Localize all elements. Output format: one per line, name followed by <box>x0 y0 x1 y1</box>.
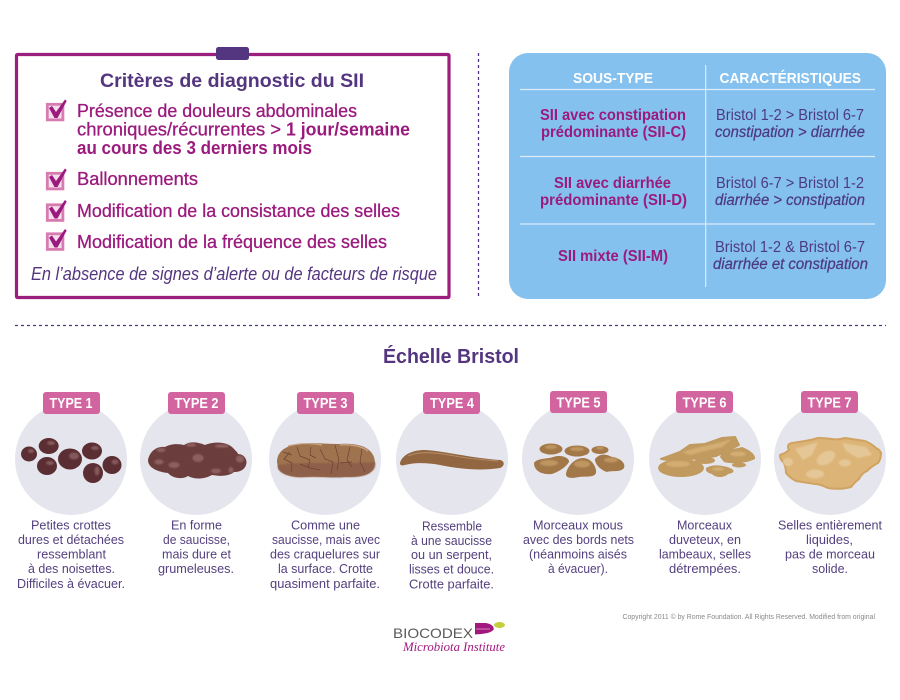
caption: type 3 <box>270 518 381 591</box>
caption: type 2: de saucisse, <box>163 532 230 547</box>
criterion 3 text: Modification de la consistance des selles <box>77 201 400 221</box>
caption: type 6: lambeaux, selles <box>659 546 751 562</box>
badge: type 2 <box>168 392 225 414</box>
panel tab <box>216 47 249 60</box>
badge: type 4: TYPE 4 <box>430 395 475 412</box>
criterion 1 text: Présence de douleurs abdominales <box>77 101 357 121</box>
caption: type 6: duveteux, en <box>669 532 741 547</box>
badge: type 4 <box>423 392 480 414</box>
caption: type 6: détrempées. <box>669 561 741 576</box>
badge: type 5 <box>550 391 607 413</box>
criterion 1 text <box>77 101 410 158</box>
caption: type 2 <box>158 518 234 576</box>
caption: type 3: saucisse, mais avec <box>272 532 380 547</box>
badge: type 7: TYPE 7 <box>808 394 852 412</box>
row: SII-M <box>558 239 868 273</box>
logo: Biocodex Microbiota Institute <box>393 622 505 654</box>
italic note: En l’absence de signes d’alerte ou de facteurs de risque <box>31 264 437 284</box>
icon: checkbox 4 <box>47 229 67 249</box>
caption: type 3: quasiment parfaite. <box>270 576 380 591</box>
heading: criteria title: Critères de diagnostic du SII <box>100 70 364 92</box>
icon: checkbox 1 <box>47 100 67 120</box>
illustration: soft blobs <box>534 444 624 478</box>
panel: type 5 <box>522 391 634 576</box>
illustration: separate hard lumps <box>21 438 122 483</box>
badge: type 3 <box>297 392 354 414</box>
panel: type 7 <box>774 391 886 576</box>
table header: SOUS-TYPE <box>573 70 653 87</box>
row: SII-D: Bristol 6-7 > Bristol 1-2 <box>716 175 864 192</box>
badge: type 6: TYPE 6 <box>682 394 726 412</box>
caption: type 7: liquides, <box>806 532 853 547</box>
panel: type 2 <box>140 392 252 576</box>
illustration: cracked sausage <box>277 443 375 477</box>
panel: type 6 <box>649 391 761 576</box>
caption: type 2: mais dure et <box>162 546 231 562</box>
heading: Bristol scale: Échelle Bristol <box>383 345 519 368</box>
caption: type 6: Morceaux <box>677 518 732 532</box>
panel: diagnostic criteria <box>16 47 449 298</box>
row: SII-M: SII mixte (SII-M) <box>558 248 668 265</box>
criterion 1 text: au cours des 3 derniers mois <box>77 138 312 158</box>
caption: type 5: à évacuer). <box>548 561 608 576</box>
illustration: liquid splat <box>780 438 881 489</box>
caption: type 4: Ressemble <box>422 518 482 534</box>
row: SII-D <box>540 175 865 209</box>
caption: type 4: Crotte parfaite. <box>409 577 494 592</box>
caption: type 1: dures et détachées <box>18 532 124 547</box>
criterion 1 text: chroniques/récurrentes > <box>77 120 281 140</box>
badge: type 2: TYPE 2 <box>174 395 218 412</box>
caption: type 7: solide. <box>812 561 848 576</box>
caption: type 5: Morceaux mous <box>533 518 623 532</box>
caption: type 1: ressemblant <box>37 546 106 562</box>
caption: type 5 <box>523 518 634 576</box>
icon: checkbox 2 <box>47 168 67 189</box>
illustration: smooth snake <box>400 450 504 469</box>
caption: type 5: (néanmoins aisés <box>529 546 627 562</box>
row: SII-C: prédominante (SII-C) <box>541 124 686 141</box>
row: SII-C: Bristol 1-2 > Bristol 6-7 <box>716 107 864 124</box>
caption: type 3: des craquelures sur <box>270 546 381 562</box>
row: SII-C: constipation > diarrhée <box>715 124 865 141</box>
caption: type 2: En forme <box>171 518 222 532</box>
row: SII-M: Bristol 1-2 & Bristol 6-7 <box>715 239 865 256</box>
caption: type 5: avec des bords nets <box>523 532 634 547</box>
row: SII-D: prédominante (SII-D) <box>540 192 687 209</box>
panel: sub-type table <box>509 53 886 299</box>
badge: type 7 <box>801 391 858 413</box>
panel: type 4 <box>396 392 508 592</box>
caption: type 3: la surface. Crotte <box>278 561 373 576</box>
panel: type 3 <box>269 392 381 591</box>
caption: type 4: à une saucisse <box>411 533 492 548</box>
row: SII-M: diarrhée et constipation <box>713 256 868 273</box>
icon: checkbox 3 <box>47 200 67 220</box>
illustration: lumpy sausage <box>148 442 247 479</box>
badge: type 3: TYPE 3 <box>304 395 348 412</box>
row: SII-D: diarrhée > constipation <box>715 192 865 209</box>
caption: type 1: Difficiles à évacuer. <box>17 576 125 591</box>
illustration: fluffy pieces <box>658 437 755 477</box>
logo: Biocodex Microbiota Institute: Microbiota Institute <box>402 639 505 654</box>
badge: type 5: TYPE 5 <box>556 394 600 412</box>
badge: type 6 <box>676 391 733 413</box>
panel: type 1 <box>15 392 127 591</box>
caption: type 3: Comme une <box>291 518 360 532</box>
caption: type 4 <box>409 518 494 592</box>
caption: type 1: à des noisettes. <box>28 561 115 576</box>
caption: type 1 <box>17 518 125 591</box>
logo: Biocodex Microbiota Institute: BIOCODEX <box>393 625 474 641</box>
caption: type 4: ou un serpent, <box>411 547 492 562</box>
badge: type 1: TYPE 1 <box>50 395 92 412</box>
badge: type 1 <box>43 392 100 414</box>
criterion 4 text: Modification de la fréquence des selles <box>77 232 387 252</box>
table header: CARACTÉRISTIQUES <box>720 70 861 87</box>
copyright note: Copyright 2011 © by Rome Foundation. All Rights Reserved. Modified from original <box>622 612 875 621</box>
table header <box>573 70 861 87</box>
criterion 1 text: 1 jour/semaine <box>286 120 410 140</box>
caption: type 7: Selles entièrement <box>778 518 882 532</box>
caption: type 7: pas de morceau <box>785 546 875 562</box>
caption: type 4: lisses et douce. <box>409 562 494 577</box>
criterion 2 text: Ballonnements <box>77 169 198 189</box>
caption: type 1: Petites crottes <box>31 518 111 532</box>
row: SII-D: SII avec diarrhée <box>554 175 671 192</box>
row: SII-C <box>540 107 865 141</box>
caption: type 2: grumeleuses. <box>158 561 234 576</box>
caption: type 6 <box>659 518 751 576</box>
caption: type 7 <box>778 518 882 576</box>
row: SII-C: SII avec constipation <box>540 107 686 124</box>
